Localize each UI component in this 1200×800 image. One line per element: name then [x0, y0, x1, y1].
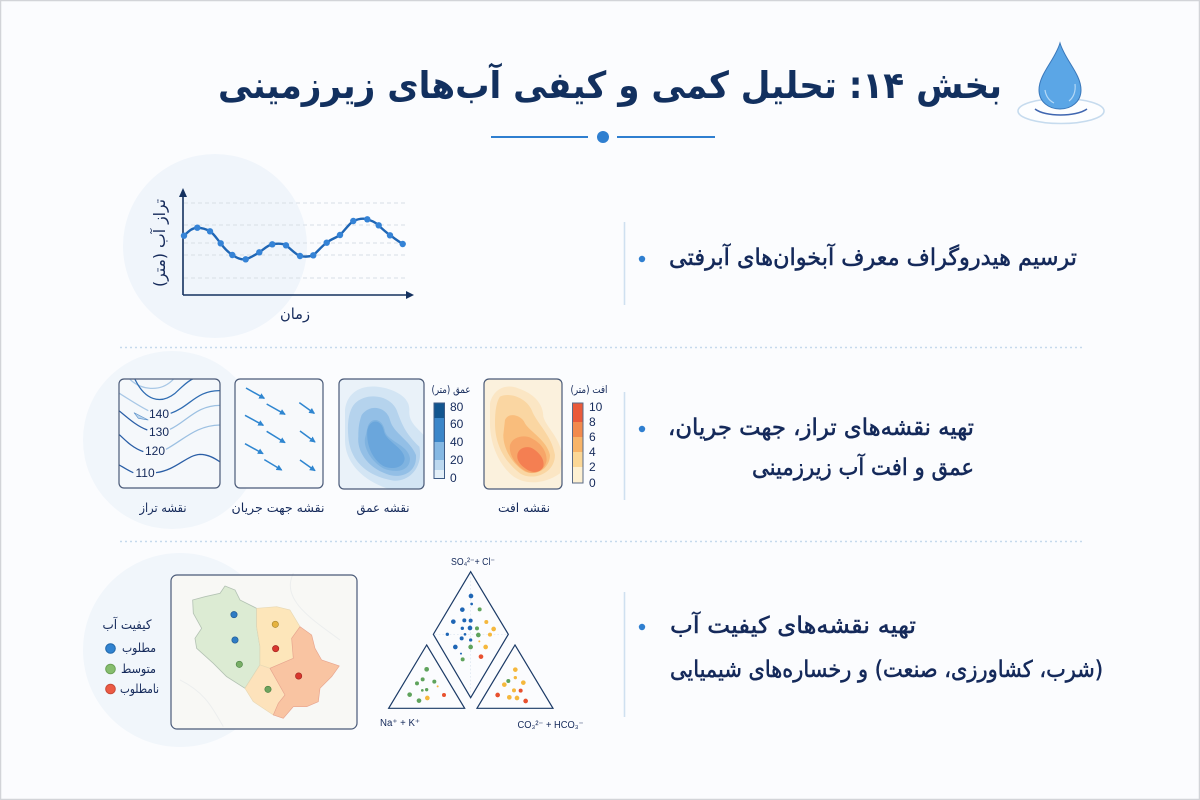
axes	[183, 192, 409, 295]
piper triangles	[389, 572, 553, 708]
y axis label: تراز آب (متر)	[150, 199, 170, 287]
bullet 3	[639, 624, 645, 630]
quality legend: کیفیت آب	[102, 616, 152, 633]
quality legend: متوسط	[121, 661, 156, 677]
panel: maps	[83, 351, 608, 529]
legend: depth	[432, 384, 470, 485]
map labels: نقشه افت	[498, 500, 550, 515]
contour labels: 140	[149, 407, 169, 421]
legend: drawdown: 8	[589, 415, 596, 429]
bullet 2	[639, 426, 645, 432]
map: depth	[339, 379, 427, 490]
arrow: y axis	[179, 188, 187, 197]
text block: maps: تهیه نقشه‌های تراز، جهت جریان،	[668, 415, 974, 441]
x axis label: زمان	[280, 305, 310, 323]
text block: water quality	[670, 611, 1103, 683]
map: flow direction	[235, 379, 323, 488]
panel: water quality	[83, 553, 357, 747]
panel: hydrograph	[123, 154, 414, 338]
legend: depth: 40	[450, 435, 464, 449]
divider 1	[120, 346, 1085, 348]
quality legend: نامطلوب	[120, 681, 159, 697]
contour labels: 130	[149, 425, 169, 439]
piper labels: Na⁺ + K⁺	[380, 718, 420, 729]
contour labels	[136, 407, 169, 480]
contour labels: 120	[145, 444, 165, 458]
legend: drawdown: 2	[589, 460, 596, 474]
map: contour	[119, 379, 221, 488]
map labels	[139, 500, 550, 516]
row 1 separator	[624, 222, 626, 305]
text block: water quality: تهیه نقشه‌های کیفیت آب	[670, 611, 916, 639]
piper points	[446, 594, 473, 655]
text block: hydrograph: ترسیم هیدروگراف معرف آبخوان‌های آبرفتی	[669, 243, 1077, 271]
title: بخش ۱۴: تحلیل کمی و کیفی آب‌های زیرزمینی	[218, 62, 1002, 107]
icon: water drop	[1018, 43, 1104, 124]
data points	[181, 216, 406, 262]
legend: drawdown: 0	[589, 476, 596, 490]
quality legend: مطلوب	[122, 640, 156, 656]
legend: drawdown: 6	[589, 430, 596, 444]
bullet 1	[639, 256, 645, 262]
legend: drawdown	[570, 384, 608, 490]
legend: depth: 0	[450, 471, 457, 485]
divider 2	[120, 540, 1085, 542]
hydrograph line	[184, 219, 403, 259]
legend: drawdown: 10	[589, 400, 603, 414]
map labels: نقشه عمق	[356, 500, 410, 516]
row 3 separator	[624, 592, 626, 717]
piper labels: CO₃²⁻ + HCO₃⁻	[518, 720, 584, 731]
legend: depth: 80	[450, 400, 464, 414]
panel: piper diagram	[380, 557, 584, 731]
title ornament	[491, 131, 715, 143]
arrow: x axis	[406, 291, 414, 299]
legend: drawdown: 4	[589, 445, 596, 459]
row 2 separator	[624, 392, 626, 500]
text block: maps	[668, 415, 974, 481]
map labels: نقشه جهت جریان	[232, 500, 324, 516]
piper labels	[380, 557, 584, 731]
legend: depth: 20	[450, 453, 464, 467]
map labels: نقشه تراز	[139, 500, 186, 516]
quality legend	[102, 616, 159, 697]
map: drawdown	[484, 379, 562, 489]
legend: depth: 60	[450, 417, 464, 431]
quality map	[171, 573, 357, 729]
contour labels: 110	[136, 466, 155, 480]
legend: depth: عمق (متر)	[432, 384, 470, 396]
text block: maps: عمق و افت آب زیرزمینی	[752, 453, 974, 481]
legend: drawdown: افت (متر)	[570, 384, 608, 396]
piper labels: SO₄²⁻+ Cl⁻	[451, 557, 495, 568]
text block: water quality: (شرب، کشاورزی، صنعت) و رخساره‌های شیمیایی	[670, 657, 1103, 683]
